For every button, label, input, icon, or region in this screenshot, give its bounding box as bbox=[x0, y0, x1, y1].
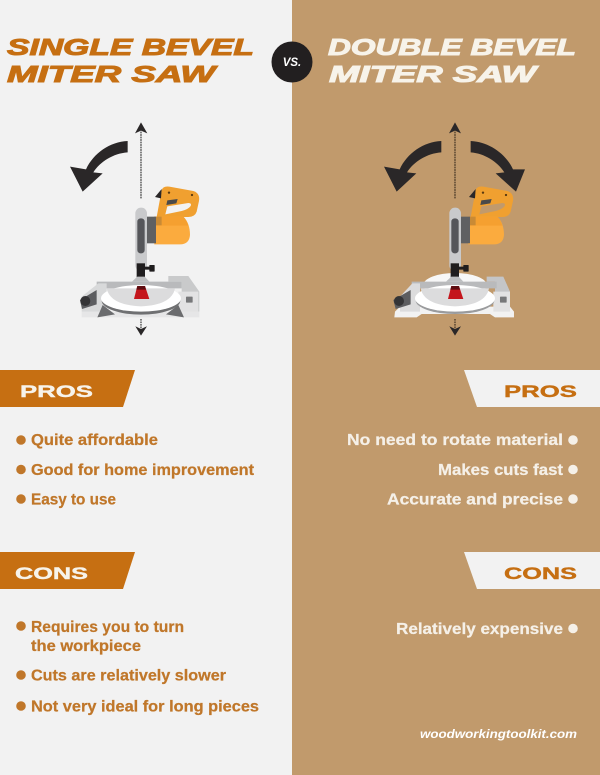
saw table top bbox=[423, 273, 487, 297]
banner: right pros bbox=[464, 370, 600, 407]
title: single bevel miter saw bbox=[7, 34, 254, 87]
saw handle bbox=[155, 186, 199, 217]
pro item: quite affordable: Quite affordable bbox=[31, 432, 158, 449]
con item: requires you to turn the workpiece: Requires you to turn bbox=[31, 619, 184, 636]
arrow: vertical up bbox=[135, 122, 147, 198]
pro item: makes cuts fast: Makes cuts fast bbox=[438, 462, 564, 479]
con item: requires you to turn the workpiece: the workpiece bbox=[31, 638, 141, 655]
con item: relatively expensive: Relatively expensive bbox=[396, 621, 563, 638]
banner: left pros: PROS bbox=[20, 382, 93, 401]
banner: left pros bbox=[0, 370, 135, 407]
banner: left cons: CONS bbox=[15, 564, 88, 583]
list: right pros bbox=[347, 432, 577, 508]
title: single bevel miter saw: MITER SAW bbox=[7, 61, 218, 87]
con item: requires you to turn the workpiece bbox=[17, 619, 184, 655]
arrow: curved tilt left bbox=[384, 141, 441, 192]
vs badge bbox=[272, 42, 312, 82]
illustration: single bevel saw bbox=[70, 122, 199, 336]
title: double bevel miter saw: MITER SAW bbox=[329, 61, 539, 87]
panel: single bevel background bbox=[0, 0, 292, 775]
con item: not very ideal for long pieces: Not very ideal for long pieces bbox=[31, 698, 259, 716]
arrow: vertical up bbox=[449, 122, 461, 198]
banner: right pros: PROS bbox=[504, 382, 577, 401]
banner: right cons bbox=[464, 552, 600, 589]
arrow: curved tilt right bbox=[471, 141, 525, 192]
title: double bevel miter saw: DOUBLE BEVEL bbox=[328, 34, 576, 60]
pro item: no need to rotate material: No need to rotate material bbox=[347, 432, 563, 449]
saw column bbox=[132, 208, 155, 282]
saw motor bbox=[147, 217, 190, 244]
vs badge: VS. bbox=[283, 57, 301, 69]
title: double bevel miter saw bbox=[328, 34, 576, 87]
list: left pros bbox=[17, 432, 255, 508]
saw column bbox=[446, 208, 469, 282]
arrow: vertical down bbox=[135, 319, 147, 336]
saw base bbox=[80, 276, 199, 317]
list: left cons bbox=[17, 619, 259, 716]
illustration: double bevel saw bbox=[384, 122, 525, 336]
pro item: easy to use: Easy to use bbox=[31, 492, 116, 508]
saw base bbox=[393, 277, 514, 317]
saw motor bbox=[461, 217, 504, 244]
title: single bevel miter saw: SINGLE BEVEL bbox=[7, 34, 254, 60]
source url: woodworkingtoolkit.com bbox=[420, 729, 577, 741]
banner: left cons bbox=[0, 552, 135, 589]
pro item: accurate and precise: Accurate and precise bbox=[387, 492, 563, 508]
saw handle bbox=[469, 186, 513, 217]
banner: right cons: CONS bbox=[504, 564, 577, 583]
arrow: vertical down bbox=[449, 319, 461, 336]
arrow: curved tilt left bbox=[70, 141, 128, 192]
pro item: good for home improvement: Good for home improvement bbox=[31, 462, 255, 479]
con item: cuts are relatively slower: Cuts are relatively slower bbox=[31, 668, 226, 684]
panel: double bevel background bbox=[292, 0, 600, 775]
